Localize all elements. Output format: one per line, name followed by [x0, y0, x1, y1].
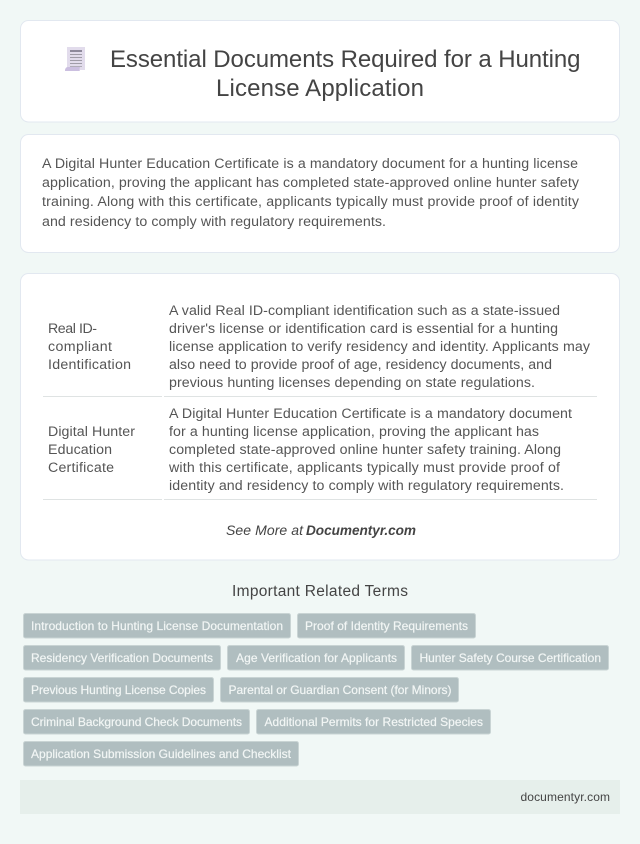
title: Essential Documents Required for a Hunting: [110, 46, 580, 73]
tags: related terms: Previous Hunting License Copies: [31, 683, 206, 697]
panel: header: [20, 20, 620, 122]
tags: related terms: Introduction to Hunting License Documentation: [31, 619, 283, 633]
see more link: See More at: [226, 522, 304, 538]
row: Real ID-compliant Identification: license application to verify residency and identity. Applicants may: [169, 339, 591, 355]
tags: related terms: Parental or Guardian Consent (for Minors): [228, 683, 452, 697]
row: Digital Hunter Education Certificate: Digital Hunter: [48, 424, 135, 440]
row: Real ID-compliant Identification: driver's license or identification card is essential for a hunting: [169, 321, 558, 337]
row: Real ID-compliant Identification: previous hunting licenses depending on state regulations.: [169, 375, 535, 391]
see more link: [226, 522, 416, 538]
title: [110, 46, 580, 102]
row: Digital Hunter Education Certificate: [43, 406, 597, 500]
row: Digital Hunter Education Certificate: identity and residency to comply with regulatory requirements.: [169, 478, 564, 494]
tags: related terms: Additional Permits for Restricted Species: [264, 715, 483, 729]
row: Real ID-compliant Identification: Identification: [48, 357, 131, 373]
row: Real ID-compliant Identification: Real ID-: [48, 321, 97, 337]
row: Real ID-compliant Identification: also need to provide proof of age, residency documents, and: [169, 357, 552, 373]
row: Real ID-compliant Identification: A valid Real ID-compliant identification such as a state-issued: [169, 303, 560, 319]
icon: document scroll: [65, 47, 85, 71]
panel: intro: [20, 134, 620, 252]
tags: related terms: Age Verification for Applicants: [236, 651, 397, 665]
row: Digital Hunter Education Certificate: Education: [48, 442, 112, 458]
footer: documentyr.com: [520, 790, 610, 804]
row: Digital Hunter Education Certificate: with this certificate, applicants typically must provide proof of: [168, 460, 560, 476]
tags: related terms: Criminal Background Check Documents: [31, 715, 242, 729]
row: Digital Hunter Education Certificate: completed state-approved online hunter safety training. Along: [169, 442, 561, 458]
row: Real ID-compliant Identification: compliant: [48, 339, 112, 355]
see more link: Documentyr.com: [306, 523, 416, 538]
heading: important related terms: Important Related Terms: [232, 583, 408, 600]
tags: related terms: Application Submission Guidelines and Checklist: [31, 747, 292, 761]
row: Digital Hunter Education Certificate: Certificate: [48, 460, 114, 476]
intro text: training. Along with this certificate, applicants typically must provide proof of identity: [42, 194, 580, 210]
intro text: and residency to comply with regulatory requirements.: [42, 214, 386, 230]
tags: related terms: Proof of Identity Requirements: [305, 619, 468, 633]
row: Real ID-compliant Identification: [43, 303, 597, 397]
tags: related terms: Residency Verification Documents: [31, 651, 213, 665]
intro text: A Digital Hunter Education Certificate is a mandatory document for a hunting license: [42, 156, 578, 172]
footer: [20, 780, 620, 814]
intro text: application, proving the applicant has completed state-approved online hunter safety: [42, 175, 580, 191]
row: Digital Hunter Education Certificate: A Digital Hunter Education Certificate is a mandatory document: [169, 406, 572, 422]
title: License Application: [216, 75, 424, 102]
row: Digital Hunter Education Certificate: for a hunting license application, proving the applicant has: [169, 424, 539, 440]
tags: related terms: [24, 614, 608, 766]
intro text: [42, 156, 580, 230]
tags: related terms: Hunter Safety Course Certification: [420, 651, 601, 665]
panel: document table: [20, 274, 620, 560]
